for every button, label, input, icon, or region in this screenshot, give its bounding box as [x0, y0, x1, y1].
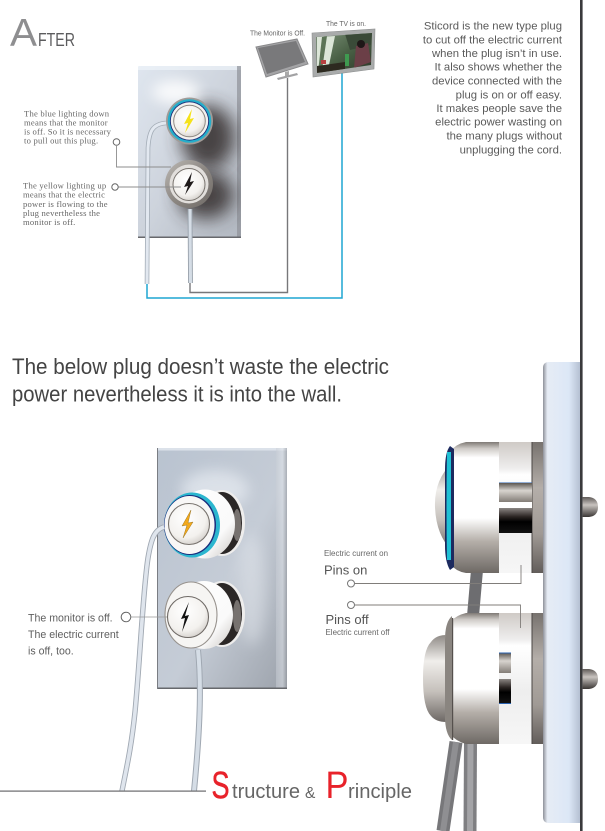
- vertical page divider: [580, 0, 583, 831]
- icon: orange bolt: [182, 510, 193, 538]
- description paragraph: device connected with the: [432, 76, 562, 88]
- note: monitor is off: The monitor is off.: [28, 612, 113, 624]
- description paragraph: [423, 20, 563, 156]
- side view: cords below lower plug: [443, 742, 470, 831]
- section title: Structure & Principle: tructure: [232, 780, 300, 803]
- cords from top diagram plugs: [147, 123, 190, 284]
- section title: Structure & Principle: &: [305, 785, 316, 802]
- label: pins on: [324, 549, 521, 587]
- description paragraph: It also shows whether the: [435, 62, 562, 74]
- icon: yellow bolt: [184, 109, 194, 133]
- note: blue lighting: [24, 108, 112, 146]
- headline: The below plug doesn’t waste the electric: [12, 354, 389, 379]
- label: pins off: [326, 602, 520, 637]
- side view: cord between plugs: [473, 570, 477, 616]
- front plug lower: [165, 581, 245, 649]
- note: yellow lighting: The yellow lighting up: [23, 180, 106, 190]
- note: blue lighting: to pull out this plug.: [24, 136, 98, 146]
- description paragraph: It makes people save the: [436, 103, 562, 115]
- icon: black bolt: [181, 602, 189, 632]
- description paragraph: the many plugs without: [446, 130, 563, 142]
- note: yellow lighting: plug nevertheless the: [23, 208, 100, 218]
- side view: upper plug: [435, 442, 543, 573]
- note: yellow lighting: [23, 180, 108, 227]
- headline: [12, 354, 389, 406]
- description paragraph: Sticord is the new type plug: [424, 20, 562, 32]
- section title: Structure & Principle: P: [326, 765, 348, 807]
- note: blue lighting: is off. So it is necessary: [24, 126, 112, 136]
- description paragraph: to cut off the electric current: [423, 34, 563, 46]
- side view: wall plate: [543, 362, 580, 823]
- description paragraph: when the plug isn’t in use.: [431, 48, 562, 60]
- description paragraph: unplugging the cord.: [460, 144, 562, 156]
- cords from large plugs: [122, 527, 200, 791]
- label: pins on: Electric current on: [324, 549, 388, 558]
- section title: Structure & Principle: rinciple: [348, 780, 412, 803]
- section title: Structure & Principle: [212, 765, 412, 807]
- window: pins on: [499, 482, 532, 533]
- note: monitor is off: is off, too.: [28, 646, 74, 658]
- note: yellow lighting: means that the electric: [23, 190, 105, 200]
- section title: Structure & Principle: S: [212, 765, 230, 807]
- title: After: [10, 12, 75, 55]
- label: TV on: The TV is on.: [326, 19, 366, 28]
- note: monitor is off: [28, 612, 119, 658]
- icon: dark bolt: [184, 172, 194, 195]
- wall plate with two plugs, top diagram: [138, 66, 241, 238]
- label: pins off: Electric current off: [326, 628, 390, 637]
- TV: on: [312, 29, 375, 77]
- note: yellow lighting: monitor is off.: [23, 217, 76, 227]
- monitor: off: [256, 39, 308, 80]
- front plug upper: [164, 490, 245, 558]
- window: pins off: [499, 652, 511, 704]
- description paragraph: plug is on or off easy.: [456, 90, 562, 102]
- label: pins off: Pins off: [326, 612, 369, 627]
- top plug: blue ring: [166, 98, 213, 144]
- callout: front plug: [121, 612, 167, 622]
- wall plate with two plugs, large front view: [157, 448, 287, 689]
- note: blue lighting: means that the monitor: [24, 118, 108, 128]
- headline: power nevertheless it is into the wall.: [12, 382, 342, 406]
- baseline rule: [0, 790, 206, 792]
- lower plug: dark bolt: [165, 160, 213, 208]
- title: After: FTER: [38, 30, 75, 50]
- wire: grey to monitor: [190, 78, 288, 292]
- label: pins on: Pins on: [324, 562, 367, 578]
- callout lines: top diagram: [112, 139, 181, 190]
- note: blue lighting: The blue lighting down: [24, 108, 110, 118]
- description paragraph: electric power wasting on: [435, 116, 562, 128]
- side view: rear knobs: [583, 497, 598, 689]
- note: monitor is off: The electric current: [28, 629, 119, 641]
- wire: blue to TV: [147, 72, 342, 298]
- title: After: A: [10, 12, 37, 55]
- label: monitor off: The Monitor is Off.: [250, 28, 305, 38]
- note: yellow lighting: power is flowing to the: [23, 199, 108, 209]
- side view: lower plug: [423, 613, 543, 744]
